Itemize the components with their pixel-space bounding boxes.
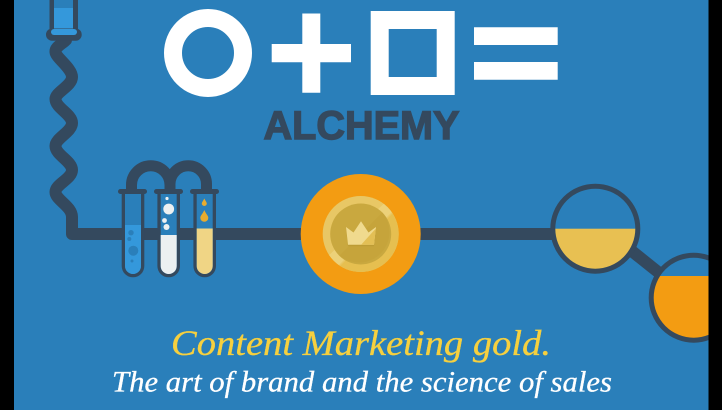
equation: circle plus square equals (173, 11, 558, 95)
icon: flask half-filled yellow (550, 186, 640, 273)
connector between flasks (628, 248, 668, 280)
right black edge (708, 0, 722, 410)
circle symbol (173, 18, 243, 88)
plus symbol (272, 14, 351, 93)
icon: source tube (46, 0, 82, 41)
icon: gold coin with crown (301, 174, 421, 294)
icon: test tube yellow (190, 189, 219, 280)
tagline heading: Content Marketing gold. (171, 323, 551, 363)
icon: test tube blue (118, 189, 147, 280)
crown (346, 222, 376, 245)
arches connecting test tubes (132, 166, 206, 192)
equals symbol (474, 27, 558, 80)
tagline subheading: The art of brand and the science of sales (112, 366, 612, 398)
icon: flask half-filled orange (648, 252, 708, 343)
icon: test tube white (154, 189, 183, 280)
square symbol (371, 11, 455, 95)
pipeline: hose and horizontal line (55, 40, 560, 234)
title: ALCHEMY: ALCHEMY (264, 104, 460, 148)
